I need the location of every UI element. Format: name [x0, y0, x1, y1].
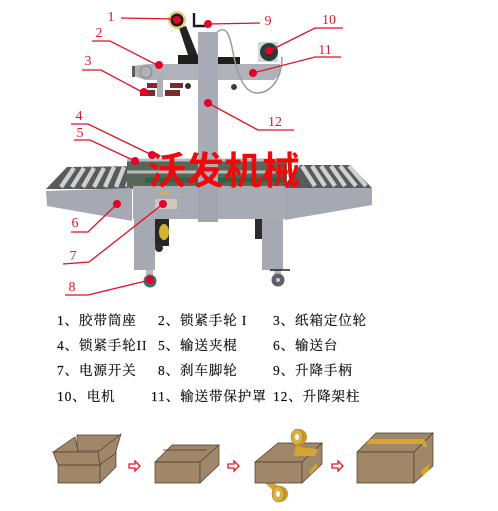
callout 9 [204, 14, 272, 29]
lifting handle [194, 13, 205, 26]
power switch [155, 199, 177, 209]
legend row 3: 8、刹车脚轮 [158, 363, 238, 378]
callout 6: 6 [72, 216, 78, 231]
positioning wheels [140, 73, 237, 97]
callout 12 [204, 99, 294, 130]
callouts [63, 10, 343, 295]
arrow 2 [228, 461, 239, 471]
hose [217, 30, 282, 93]
legend row 4: 10、电机 [57, 388, 116, 404]
callout 9: 9 [264, 14, 272, 29]
callout 5 [74, 126, 139, 165]
callout 11: 11 [318, 43, 332, 58]
legend row 1 [57, 312, 367, 328]
callout 3 [82, 54, 148, 96]
callout 3: 3 [84, 54, 92, 69]
conveyor table frame [46, 186, 372, 222]
machine illustration [46, 11, 372, 288]
legend row 1: 3、纸箱定位轮 [273, 313, 367, 328]
callout 2 [92, 26, 163, 69]
legend row 1: 2、锁紧手轮 I [158, 312, 247, 328]
legend row 4: 11、输送带保护罩 [151, 388, 267, 404]
callout 10: 10 [322, 13, 336, 28]
legend row 4 [57, 388, 360, 404]
step 3: taping [255, 429, 322, 502]
watermark: 沃发机械 [148, 151, 300, 193]
tape roll holder [168, 11, 198, 64]
legend row 1: 1、胶带筒座 [57, 312, 137, 328]
callout 2: 2 [96, 26, 102, 41]
conveyor rollers [46, 159, 372, 189]
lifting column [198, 32, 218, 222]
callout 12: 12 [268, 115, 282, 130]
callout 8: 8 [68, 280, 76, 295]
callout 7: 7 [70, 249, 76, 264]
callout 7 [63, 200, 167, 264]
legend row 4: 12、升降架柱 [273, 388, 360, 404]
callout 4 [71, 109, 156, 159]
arrow 1 [129, 461, 140, 471]
legend row 2 [57, 337, 338, 353]
callout 1 [108, 10, 181, 25]
legend row 2: 6、输送台 [273, 338, 338, 353]
callout 6 [71, 200, 121, 232]
callout 1: 1 [108, 10, 114, 25]
upper conveyor beam [132, 57, 280, 80]
callout 5: 5 [76, 126, 84, 141]
callout 11 [249, 43, 341, 77]
parts legend [57, 312, 367, 404]
legend row 3 [57, 362, 353, 378]
legend row 3: 7、电源开关 [57, 362, 137, 378]
callout 4: 4 [76, 109, 82, 124]
callout 8 [65, 276, 154, 295]
legend row 2: 4、锁紧手轮II [57, 337, 147, 353]
legend row 2: 5、输送夹棍 [158, 337, 238, 353]
legend row 3: 9、升降手柄 [273, 362, 353, 378]
motor [258, 42, 278, 62]
step 1: open box [53, 434, 121, 483]
legs and casters [134, 219, 290, 288]
arrow 3 [332, 461, 343, 471]
box sealing steps [53, 429, 433, 502]
callout 10 [265, 13, 343, 55]
step 4: sealed box [357, 433, 433, 483]
step 2: flaps folded [155, 445, 219, 483]
